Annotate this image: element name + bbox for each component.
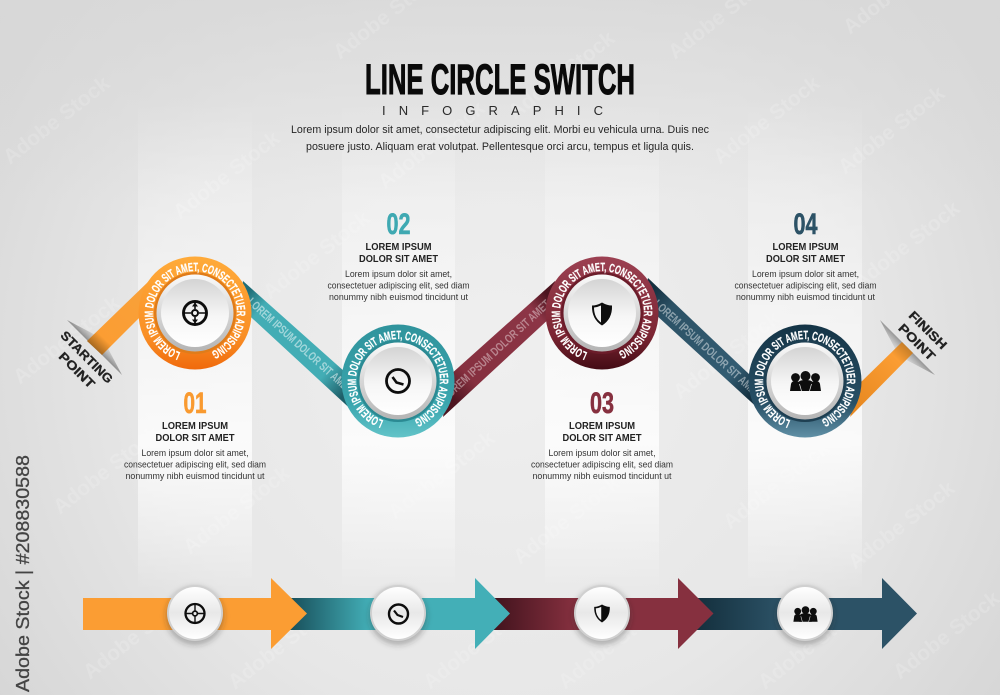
- bottom disc 2 with clock: [369, 585, 427, 645]
- ribbon: maroon: LOREM IPSUM DOLOR SIT AMET,: [440, 296, 554, 403]
- bottom disc 1 with compass: [166, 585, 224, 645]
- circle 03: [546, 256, 658, 370]
- vertical light columns: [138, 100, 862, 590]
- stock watermarks: Adobe Stock: [849, 197, 964, 294]
- step 04 text: consectetuer adipiscing elit, sed diam: [734, 280, 877, 292]
- step 04 text: nonummy nibh euismod tincidunt ut: [736, 292, 875, 303]
- title: LINE CIRCLE SWITCH: [365, 56, 635, 104]
- ribbon: finish orange: [850, 342, 913, 417]
- icon: people: [790, 371, 821, 391]
- starting point tag: POINT: [56, 349, 98, 392]
- stock watermarks: Adobe Stock: [9, 292, 124, 389]
- ribbon: maroon: [440, 281, 555, 417]
- step 04 text: LOREM IPSUM: [772, 241, 839, 253]
- intro text: [291, 124, 709, 153]
- step 01 text: [124, 387, 266, 482]
- icon: clock small: [389, 604, 408, 624]
- bottom disc 3 with shield: [573, 585, 631, 645]
- step 04 text: 04: [794, 208, 818, 241]
- icon: shield small: [594, 605, 610, 622]
- step 02 text: [328, 208, 470, 303]
- ribbon: teal: [240, 281, 357, 415]
- step 01 text: consectetuer adipiscing elit, sed diam: [124, 460, 266, 470]
- starting point tag: STARTING: [58, 328, 116, 386]
- finish point tag: FINISH: [906, 308, 950, 352]
- stock watermarks: Adobe Stock: [49, 422, 164, 519]
- bottom disc 4 with people: [776, 585, 834, 645]
- icon: people small: [793, 606, 818, 622]
- step 02 text: DOLOR SIT AMET: [359, 253, 439, 265]
- stock id side text: Adobe Stock | #208830588: [13, 455, 33, 692]
- step 02 text: nonummy nibh euismod tincidunt ut: [329, 292, 468, 303]
- step 01 text: Lorem ipsum dolor sit amet,: [142, 448, 248, 459]
- ribbon: start orange: [87, 280, 150, 355]
- step 03 text: DOLOR SIT AMET: [562, 432, 642, 444]
- step 03 text: Lorem ipsum dolor sit amet,: [548, 448, 656, 459]
- icon: clock: [386, 370, 410, 392]
- stock watermarks: Adobe Stock: [709, 72, 824, 169]
- ribbon: navy: [643, 278, 764, 412]
- circle 01: [138, 256, 252, 370]
- step 01 text: LOREM IPSUM: [162, 420, 228, 432]
- ring text 03: LOREM IPSUM DOLOR SIT AMET, CONSECTETUER ADIPISCING: [552, 262, 652, 360]
- stock watermarks: Adobe Stock: [719, 437, 834, 534]
- circle 04: [748, 324, 862, 438]
- step 01 text: DOLOR SIT AMET: [156, 432, 235, 444]
- ring text 01: LOREM IPSUM DOLOR SIT AMET, CONSECTETUER ADIPISCING: [144, 262, 246, 360]
- step 01 text: nonummy nibh euismod tincidunt ut: [126, 471, 265, 482]
- stock watermarks: Adobe Stock: [179, 462, 294, 559]
- stock watermarks: Adobe Stock: [419, 597, 534, 694]
- intro text: posuere justo. Aliquam erat volutpat. Pellentesque orci arcu, tempus et ligula quis.: [306, 141, 694, 153]
- ribbon: navy: LOREM IPSUM DOLOR SIT AMET,: [651, 297, 764, 401]
- stock watermarks: Adobe Stock: [259, 207, 374, 304]
- ring text 04: LOREM IPSUM DOLOR SIT AMET, CONSECTETUER ADIPISCING: [754, 330, 856, 428]
- bottom arrow: orange: [83, 578, 307, 649]
- stock watermarks: Adobe Stock: [669, 307, 784, 404]
- step 02 text: 02: [386, 208, 410, 241]
- ring text 02: LOREM IPSUM DOLOR SIT AMET, CONSECTETUER ADIPISCING: [348, 330, 448, 428]
- step 02 text: Lorem ipsum dolor sit amet,: [345, 269, 452, 280]
- bottom arrow: navy: [690, 578, 917, 649]
- step 01 text: 01: [184, 387, 206, 420]
- stock watermarks: Adobe Stock: [224, 597, 339, 694]
- stock watermarks: Adobe Stock: [844, 477, 959, 574]
- stock watermarks: Adobe Stock: [384, 427, 499, 524]
- step 02 text: LOREM IPSUM: [366, 241, 432, 253]
- step 04 text: [734, 208, 877, 303]
- stock watermarks: Adobe Stock: [504, 27, 619, 124]
- step 03 text: 03: [590, 387, 614, 420]
- step 02 text: consectetuer adipiscing elit, sed diam: [328, 280, 470, 292]
- starting point tag: [56, 320, 122, 392]
- stock watermarks: Adobe Stock: [374, 97, 489, 194]
- icon: compass small: [186, 604, 204, 623]
- bottom arrow: teal: [285, 578, 510, 649]
- stock watermarks: Adobe Stock: [169, 127, 284, 224]
- stock watermarks: Adobe Stock: [509, 472, 624, 569]
- ribbon: teal: LOREM IPSUM DOLOR SIT AMET,: [245, 295, 356, 397]
- stock watermarks: Adobe Stock: [79, 587, 194, 684]
- subtitle: INFOGRAPHIC: [382, 103, 603, 118]
- intro text: Lorem ipsum dolor sit amet, consectetur adipiscing elit. Morbi eu vehicula urna. Duis nec: [291, 124, 709, 136]
- step 03 text: consectetuer adipiscing elit, sed diam: [531, 460, 673, 470]
- step 04 text: DOLOR SIT AMET: [766, 253, 846, 265]
- step 03 text: nonummy nibh euismod tincidunt ut: [532, 471, 672, 482]
- finish point tag: [880, 308, 950, 375]
- icon: shield: [592, 302, 612, 326]
- circle 02: [342, 324, 454, 438]
- bottom arrow: maroon: [490, 578, 714, 649]
- stock watermarks: Adobe Stock: [834, 82, 949, 179]
- step 03 text: [531, 387, 673, 482]
- stock watermarks: Adobe Stock: [554, 597, 669, 694]
- step 03 text: LOREM IPSUM: [569, 420, 635, 432]
- finish point tag: POINT: [895, 321, 938, 364]
- icon: compass: [184, 302, 206, 324]
- stock watermarks: Adobe Stock: [0, 72, 114, 169]
- step 04 text: Lorem ipsum dolor sit amet,: [752, 269, 859, 280]
- stock watermarks: Adobe Stock: [754, 597, 869, 694]
